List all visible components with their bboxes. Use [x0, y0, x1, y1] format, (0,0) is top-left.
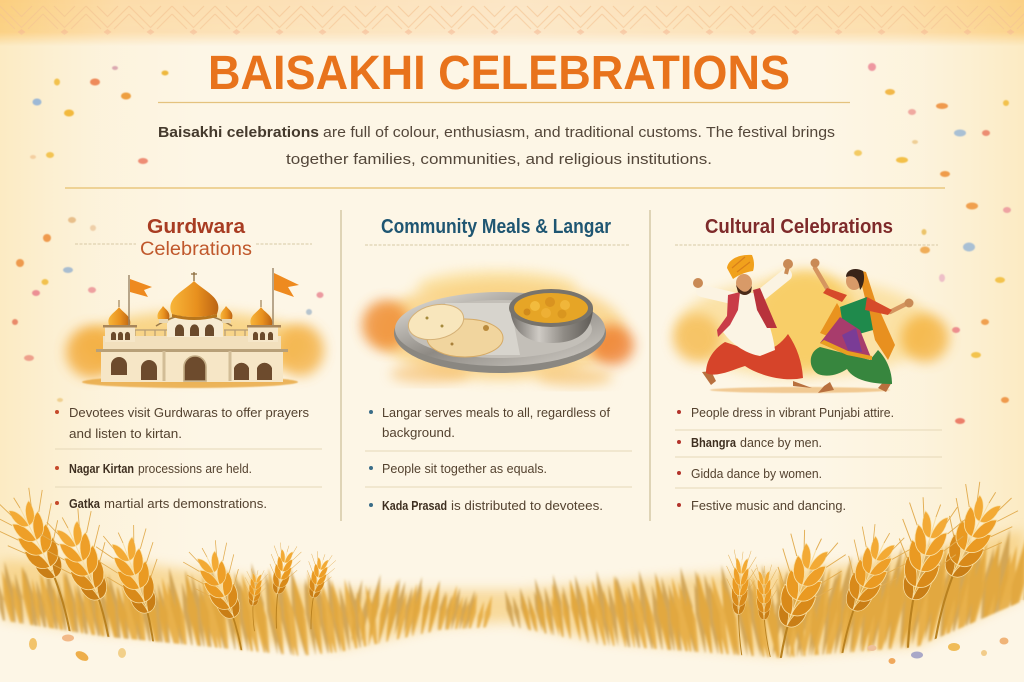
wheat ears	[0, 482, 1018, 658]
panel: Gurdwara celebrations	[55, 216, 324, 511]
decorative top band	[0, 0, 1024, 46]
bullet list: langar: Langar serves meals to all, regardless of	[382, 405, 610, 420]
icon: thali with roti and curry	[362, 270, 634, 386]
bullet list: gurdwara: processions are held.	[138, 461, 252, 476]
intro text	[158, 124, 835, 168]
icon: gurdwara illustration	[66, 268, 324, 388]
intro text: Baisakhi celebrations	[158, 124, 319, 141]
bullet list: langar: background.	[382, 425, 455, 440]
falling grains	[29, 634, 1008, 664]
bullet list: gurdwara: Gatka	[69, 497, 101, 511]
bullet list: langar: Kada Prasad	[382, 499, 447, 513]
wheat field	[0, 482, 1024, 664]
heading: Gurdwara Celebrations: Gurdwara	[147, 216, 246, 238]
heading: Gurdwara Celebrations	[75, 216, 312, 260]
bullet list: cultural: dance by men.	[740, 435, 822, 450]
bullet list: gurdwara: Nagar Kirtan	[69, 462, 134, 476]
wheat ears: right	[726, 482, 1018, 658]
bullet list: langar	[365, 405, 632, 513]
bullet list: cultural: Festive music and dancing.	[691, 498, 846, 513]
heading: Community Meals and Langar: Community Meals & Langar	[381, 216, 611, 238]
wheat grass blades	[0, 529, 1024, 665]
title: BAISAKHI CELEBRATIONS	[208, 47, 790, 100]
bullet list: gurdwara: and listen to kirtan.	[69, 426, 182, 441]
panel: community meals and langar	[362, 216, 634, 513]
icon: bhangra and gidda dancers	[673, 255, 949, 393]
bullet list: cultural: Bhangra	[691, 436, 737, 450]
field haze	[0, 530, 1024, 655]
intro text: together families, communities, and religious institutions.	[286, 151, 712, 168]
bullet list: gurdwara: Devotees visit Gurdwaras to offer prayers	[69, 405, 309, 420]
bullet list: cultural	[675, 405, 942, 513]
intro text: are full of colour, enthusiasm, and traditional customs. The festival brings	[323, 124, 835, 141]
wheat ears: left	[0, 488, 336, 650]
bullet list: cultural: Gidda dance by women.	[691, 466, 822, 481]
panel: cultural celebrations	[673, 216, 949, 513]
bullet list: langar: is distributed to devotees.	[451, 498, 603, 513]
heading: Gurdwara Celebrations: Celebrations	[140, 239, 252, 260]
bullet list: cultural: People dress in vibrant Punjabi attire.	[691, 405, 894, 420]
title underline	[158, 102, 850, 104]
figure: female gidda dancer	[810, 258, 914, 393]
confetti: right	[306, 63, 1011, 424]
bullet list: langar: People sit together as equals.	[382, 461, 547, 476]
heading: Cultural Celebrations: Cultural Celebrations	[705, 216, 893, 238]
figure: male bhangra dancer	[693, 255, 812, 388]
bullet list: gurdwara: martial arts demonstrations.	[104, 496, 267, 511]
confetti: left	[12, 66, 168, 402]
column dividers	[341, 210, 650, 521]
bullet list: gurdwara	[55, 405, 322, 511]
intro divider	[65, 187, 945, 189]
